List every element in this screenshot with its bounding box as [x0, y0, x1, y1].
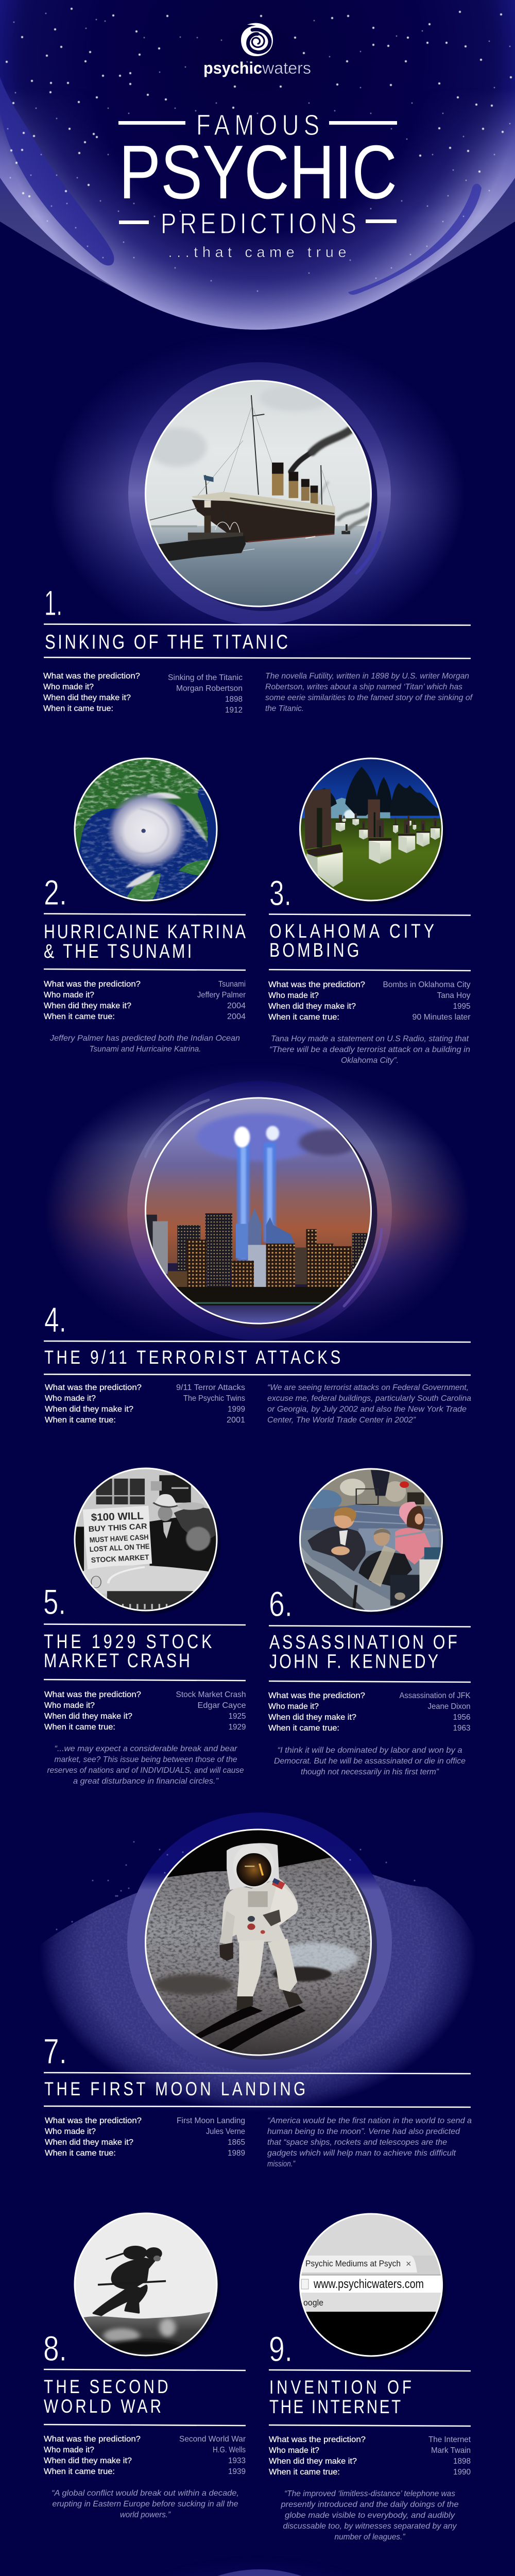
photo shadow	[304, 2217, 446, 2360]
bottom rule	[44, 657, 471, 658]
facts table: What was the prediction?	[44, 2435, 141, 2444]
header crystal ball	[0, 0, 515, 330]
facts table: 2001	[227, 1416, 245, 1425]
description: excuse me, federal buildings, particularly South Carolina	[267, 1394, 471, 1403]
heading rule left 2	[119, 221, 149, 224]
section title	[269, 921, 434, 961]
description: some eerie similarities to the famed story of the sinking of	[265, 693, 473, 702]
section title: INVENTION OF	[269, 2377, 411, 2398]
facts table: When did they make it?	[45, 1405, 133, 1414]
photo: running soldier	[75, 2214, 216, 2354]
facts table: 1939	[228, 2467, 246, 2476]
facts table: Who made it?	[45, 1394, 96, 1403]
bottom rule	[44, 2106, 471, 2107]
photo: astronaut on the moon	[141, 1827, 374, 2058]
section title: THE 9/11 TERRORIST ATTACKS	[44, 1347, 340, 1368]
facts table: Who made it?	[44, 2446, 94, 2454]
facts table: 1999	[228, 1405, 245, 1414]
description	[47, 1744, 244, 1786]
top rule	[269, 2370, 471, 2371]
photo shadow	[304, 762, 446, 904]
description: though not necessarily in his first term”	[301, 1768, 439, 1776]
bottom rule	[269, 970, 471, 971]
facts table: H.G. Wells	[213, 2446, 246, 2454]
photo frame	[75, 758, 217, 901]
rim shadow and highlight	[145, 1100, 382, 1328]
sign lettering	[88, 1510, 150, 1564]
star field	[7, 9, 511, 291]
watercolour glow behind photo	[43, 1874, 472, 2109]
description: human being to the moon”. Verne had also predicted	[267, 2127, 460, 2136]
facts table: Assassination of JFK	[400, 1691, 471, 1700]
facts table: Jeffery Palmer	[197, 991, 246, 999]
photo: browser window	[299, 2213, 445, 2358]
bottom rule	[44, 1680, 246, 1681]
section title: HURRICAINE KATRINA	[44, 921, 246, 943]
description: “...we may expect a considerable break and bear	[55, 1744, 237, 1753]
facts table: When did they make it?	[44, 2456, 132, 2465]
description: “The improved ‘limitless-distance’ telephone was	[284, 2489, 455, 2498]
facts table: 1995	[453, 1002, 471, 1011]
facts table: When did they make it?	[44, 1002, 131, 1010]
facts table: Who made it?	[269, 2446, 319, 2455]
facts table	[269, 2435, 471, 2477]
facts table: When it came true:	[44, 2467, 115, 2476]
facts table: When did they make it?	[44, 1712, 132, 1721]
top rule	[269, 1626, 471, 1627]
section 7: the first moon landing	[31, 1812, 484, 2168]
number: 8.	[43, 2329, 67, 2368]
facts table: Jules Verne	[206, 2127, 245, 2136]
photo frame	[300, 1469, 442, 1611]
top rule	[44, 2369, 246, 2370]
description	[269, 1035, 470, 1065]
heading: PREDICTIONS: PREDICTIONS	[161, 207, 356, 240]
section title: BOMBING	[269, 940, 359, 961]
facts table: First Moon Landing	[177, 2116, 245, 2125]
description: Democrat. But he will be assassinated or die in office	[274, 1757, 466, 1766]
facts table: 1933	[228, 2456, 246, 2465]
facts table: 1990	[453, 2468, 471, 2477]
section 4: the 9/11 terrorist attacks	[44, 1061, 471, 1425]
description: reserves of nations and of INDIVIDUALS, and will cause	[47, 1766, 244, 1775]
facts table: The Internet	[428, 2435, 471, 2444]
crystal rim	[128, 362, 391, 625]
description: number of leagues.”	[335, 2533, 405, 2541]
description: presently introduced and the daily doings of the	[280, 2500, 459, 2509]
facts table: Tana Hoy	[437, 991, 471, 1000]
facts table: 1912	[225, 706, 243, 715]
facts table: Who made it?	[44, 991, 94, 999]
number: 5.	[43, 1582, 66, 1622]
number: 4.	[44, 1300, 66, 1340]
top rule	[44, 624, 471, 625]
heading: PSYCHIC: PSYCHIC	[119, 130, 397, 215]
crystal rim	[127, 1081, 392, 1341]
facts table: When it came true:	[44, 1723, 115, 1732]
facts table: What was the prediction?	[269, 2435, 366, 2444]
facts table: 1956	[453, 1713, 471, 1722]
number: 9.	[269, 2329, 293, 2369]
facts table	[268, 1691, 471, 1733]
description: globe made visible to everybody, and audibly	[285, 2511, 455, 2520]
description: “I think it will be dominated by labor and won by a	[277, 1746, 462, 1755]
facts table: 1898	[225, 695, 243, 704]
facts table: What was the prediction?	[45, 2116, 142, 2125]
browser tab text: Psychic Mediums at Psych	[305, 2259, 401, 2268]
photo: man selling car	[75, 1469, 216, 1609]
wordmark light part: waters	[262, 59, 311, 77]
section title	[269, 1632, 457, 1672]
facts table: When did they make it?	[268, 1713, 356, 1722]
sign lettering: LOST ALL ON THE	[89, 1542, 150, 1553]
rim shadow	[151, 1834, 377, 2060]
facts table: When it came true:	[45, 1416, 116, 1425]
section title: THE INTERNET	[269, 2397, 401, 2418]
section title	[44, 1631, 212, 1672]
description: market, see? This issue being between those of the	[55, 1755, 237, 1764]
heading rule right 2	[366, 219, 397, 223]
description	[280, 2489, 459, 2541]
facts table: 1925	[229, 1712, 246, 1721]
section 3: Oklahoma City bombing	[268, 757, 471, 1065]
facts table: Who made it?	[45, 2127, 96, 2136]
facts table: Stock Market Crash	[176, 1690, 246, 1699]
description: that “space ships, rockets and telescopes are the	[267, 2138, 447, 2147]
description: gadgets which will help man to achieve this difficult	[267, 2149, 456, 2158]
facts table: When it came true:	[45, 2149, 116, 2158]
photo frame	[145, 1829, 371, 2055]
photo shadow	[78, 762, 220, 904]
section 10: high speed trains	[43, 2555, 471, 2576]
facts table: When it came true:	[43, 704, 113, 713]
sign lettering: BUY THIS CAR	[88, 1522, 147, 1534]
description: a great disturbance in financial circles.”	[73, 1777, 219, 1786]
facts table: What was the prediction?	[268, 1691, 365, 1700]
description: Tsunami and Hurricaine Katrina.	[90, 1045, 201, 1054]
photo frame	[145, 1098, 371, 1324]
facts table	[44, 980, 246, 1021]
section title: THE FIRST MOON LANDING	[44, 2079, 305, 2100]
description: Tana Hoy made a statement on U.S Radio, stating that	[271, 1035, 469, 1043]
facts table	[45, 1383, 245, 1425]
photo: hurricane from space	[75, 759, 216, 900]
section 9: invention of the internet	[269, 2213, 471, 2541]
description	[265, 672, 473, 713]
section 6: assassination of John F. Kennedy	[268, 1468, 471, 1776]
section 2: Hurricane Katrina and the tsunami	[44, 752, 246, 1054]
facts table: Jeane Dixon	[427, 1702, 471, 1711]
top rule	[44, 1341, 471, 1342]
facts table: Bombs in Oklahoma City	[383, 980, 471, 989]
sign lettering: $100 WILL	[91, 1510, 144, 1523]
crystal rim	[127, 2569, 392, 2576]
description: Center, The World Trade Center in 2002”	[267, 1416, 416, 1425]
description	[274, 1746, 466, 1776]
title block	[118, 108, 397, 261]
description	[52, 2489, 239, 2519]
facts table: When it came true:	[268, 1724, 339, 1733]
facts table: When did they make it?	[268, 1002, 356, 1011]
description: “We are seeing terrorist attacks on Federal Government,	[267, 1383, 469, 1392]
photo: tribute in light over Manhattan	[141, 1095, 374, 1325]
section title: SINKING OF THE TITANIC	[45, 631, 288, 653]
section 5: the 1929 stock market crash	[43, 1467, 246, 1786]
facts table: Who made it?	[44, 1701, 95, 1710]
photo frame	[300, 758, 442, 901]
section title: JOHN F. KENNEDY	[269, 1651, 438, 1672]
facts table: When did they make it?	[45, 2138, 133, 2147]
section 8: the Second World War	[43, 2211, 246, 2519]
description: Robertson, writes about a ship named ‘Titan’ which has	[265, 683, 462, 691]
facts table: Who made it?	[268, 1702, 319, 1711]
facts table: Tsunami	[218, 980, 246, 989]
number: 3.	[269, 873, 291, 913]
facts table: Morgan Robertson	[176, 684, 243, 693]
section 1: sinking of the Titanic	[43, 330, 473, 715]
description	[267, 2116, 472, 2168]
heading: FAMOUS: FAMOUS	[196, 108, 319, 141]
section title: OKLAHOMA CITY	[269, 921, 434, 942]
top rule	[44, 2073, 471, 2074]
photo shadow	[304, 1472, 446, 1615]
number: 6.	[269, 1584, 293, 1624]
facts table: Sinking of the Titanic	[168, 673, 243, 682]
section title: THE 1929 STOCK	[44, 1631, 212, 1653]
photo frame	[75, 1468, 217, 1611]
bottom rule	[44, 2425, 246, 2426]
description: mission.”	[267, 2160, 296, 2168]
section title: THE SECOND	[44, 2377, 168, 2398]
description: discussable too, by witnesses separated by any	[283, 2522, 457, 2531]
description: “America would be the first nation in the world to send a	[267, 2116, 472, 2125]
bottom rule	[44, 969, 246, 970]
photo shadow	[78, 2217, 220, 2359]
description: world powers.”	[120, 2511, 171, 2519]
facts table: Mark Twain	[431, 2446, 471, 2455]
glow behind photo	[58, 351, 458, 639]
description: or Georgia, by July 2002 and also the New York Trade	[267, 1405, 467, 1414]
facts table	[44, 2435, 246, 2476]
number: 2.	[44, 873, 67, 912]
heading rule right	[329, 121, 397, 125]
description: the Titanic.	[265, 704, 304, 713]
facts table: What was the prediction?	[43, 672, 140, 681]
rim shadow and highlight	[151, 385, 380, 611]
description: The novella Futility, written in 1898 by U.S. writer Morgan	[265, 672, 469, 681]
top rule	[269, 914, 471, 915]
facts table	[44, 1690, 246, 1732]
icon: spiral	[241, 23, 273, 56]
stars beside rim	[57, 1842, 415, 1929]
facts table	[268, 980, 471, 1022]
photo frame	[75, 2213, 217, 2355]
facts table: What was the prediction?	[268, 980, 365, 989]
bottom rule	[269, 2425, 471, 2426]
number: 7.	[43, 2031, 67, 2071]
facts table: 1989	[228, 2149, 245, 2158]
logo: psychicwaters	[203, 23, 311, 77]
photo: Titanic and tug	[146, 381, 370, 606]
facts table: When did they make it?	[43, 693, 131, 702]
photo shadow	[78, 1472, 220, 1614]
facts table: When did they make it?	[269, 2457, 357, 2466]
facts table: 1963	[453, 1724, 471, 1733]
section title	[44, 921, 246, 962]
description: erupting in Eastern Europe before sucking in all the	[53, 2500, 238, 2509]
wordmark bold: psychic	[203, 59, 262, 77]
number: 1.	[44, 583, 62, 623]
section title	[44, 2377, 168, 2417]
description	[49, 1034, 240, 1054]
facts table: 90 Minutes later	[412, 1013, 471, 1022]
facts table: Second World War	[179, 2435, 246, 2444]
section title	[269, 2377, 411, 2418]
facts table	[43, 672, 243, 715]
facts table: The Psychic Twins	[183, 1394, 245, 1403]
facts table: What was the prediction?	[44, 1690, 141, 1699]
browser bookmark text: oogle	[303, 2298, 323, 2308]
section title: ASSASSINATION OF	[269, 1632, 457, 1653]
photo: motorcade	[298, 1468, 446, 1614]
description: “A global conflict would break out within a decade,	[52, 2489, 239, 2498]
facts table	[45, 2116, 245, 2158]
crystal rim	[127, 1812, 392, 2072]
glow behind photo	[50, 1076, 465, 1330]
photo frame	[300, 2214, 442, 2356]
facts table: 1898	[453, 2457, 471, 2466]
description	[267, 1383, 471, 1425]
facts table: 9/11 Terror Attacks	[176, 1383, 245, 1392]
section title: WORLD WAR	[44, 2396, 161, 2417]
facts table: Who made it?	[268, 991, 319, 1000]
section title: MARKET CRASH	[44, 1650, 190, 1672]
photo: Oklahoma City memorial chairs	[298, 757, 446, 903]
heading rule left	[118, 121, 185, 125]
facts table: What was the prediction?	[44, 980, 141, 989]
bottom rule	[269, 1681, 471, 1682]
facts table: When it came true:	[44, 1012, 115, 1021]
facts table: 2004	[227, 1002, 246, 1010]
facts table: 1865	[228, 2138, 245, 2147]
top rule	[44, 1624, 246, 1625]
browser url text: www.psychicwaters.com	[313, 2277, 424, 2291]
description: Jeffery Palmer has predicted both the Indian Ocean	[49, 1034, 240, 1043]
facts table: 1929	[229, 1723, 246, 1732]
tab close mark: ×	[406, 2259, 411, 2269]
facts table: Edgar Cayce	[198, 1701, 246, 1710]
glow behind photo	[44, 2555, 471, 2576]
sign lettering: MUST HAVE CASH	[89, 1533, 149, 1544]
facts table: When it came true:	[268, 1013, 339, 1022]
facts table: Who made it?	[43, 683, 94, 691]
top rule	[44, 914, 246, 915]
description: Oklahoma City”.	[341, 1056, 399, 1065]
subtitle: ...that came true	[168, 244, 346, 261]
section title: & THE TSUNAMI	[44, 941, 192, 962]
description: “There will be a deadly terrorist attack on a building in	[269, 1045, 470, 1054]
facts table: 2004	[227, 1012, 246, 1021]
sign lettering: STOCK MARKET	[91, 1553, 149, 1564]
facts table: What was the prediction?	[45, 1383, 142, 1392]
facts table: When it came true:	[269, 2468, 340, 2477]
photo frame	[145, 381, 371, 606]
